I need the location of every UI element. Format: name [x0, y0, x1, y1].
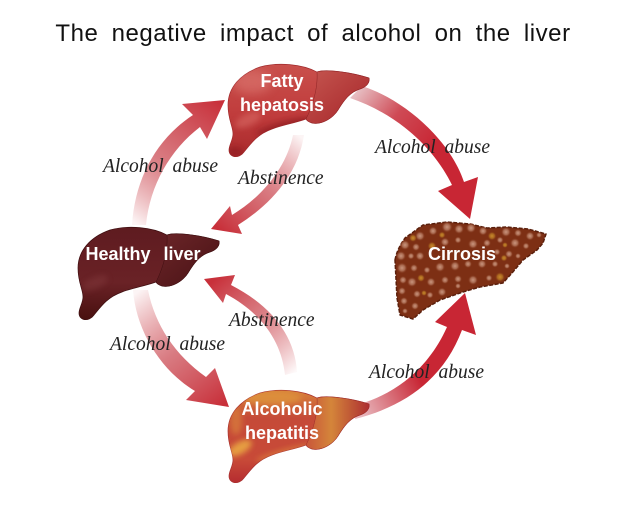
- label: Alcoholic hepatitis: Alcoholic: [241, 399, 323, 419]
- label: Alcohol abuse, upper left: Alcohol abuse: [101, 156, 218, 177]
- liver: alcoholic hepatitis: [226, 390, 369, 483]
- arrow: alcoholic hepatitis to cirrhosis: [355, 293, 476, 419]
- label: Healthy liver: Healthy liver: [85, 244, 201, 264]
- arrow: healthy liver to fatty hepatosis: [132, 100, 225, 225]
- nodules: [396, 222, 542, 314]
- arrow: healthy liver to alcoholic hepatitis: [133, 290, 229, 407]
- label: Alcohol abuse, lower right: Alcohol abuse: [367, 362, 484, 383]
- liver: cirrhosis: [395, 222, 546, 319]
- label: Alcohol abuse, lower left: Alcohol abuse: [108, 334, 225, 355]
- label: Cirrosis: Cirrosis: [428, 244, 496, 264]
- liver: fatty hepatosis: [227, 64, 369, 157]
- arrow: alcoholic hepatitis to healthy liver (abstinence): [204, 275, 297, 375]
- liver: healthy: [78, 227, 219, 320]
- label: Abstinence, lower: Abstinence: [227, 310, 315, 331]
- label: Alcoholic hepatitis: hepatitis: [245, 423, 319, 443]
- label: Abstinence, upper: Abstinence: [236, 168, 324, 189]
- label: Alcoholic hepatitis: [241, 399, 323, 443]
- label: Fatty hepatosis: [240, 71, 324, 115]
- label: Fatty hepatosis: hepatosis: [240, 95, 324, 115]
- label: Alcohol abuse, upper right: Alcohol abuse: [373, 137, 490, 158]
- arrow: fatty hepatosis to cirrhosis: [350, 86, 478, 219]
- arrow: fatty hepatosis to healthy liver (abstinence): [211, 135, 304, 234]
- title: The negative impact of alcohol on the liver: [55, 20, 571, 47]
- label: Fatty hepatosis: Fatty: [260, 71, 304, 91]
